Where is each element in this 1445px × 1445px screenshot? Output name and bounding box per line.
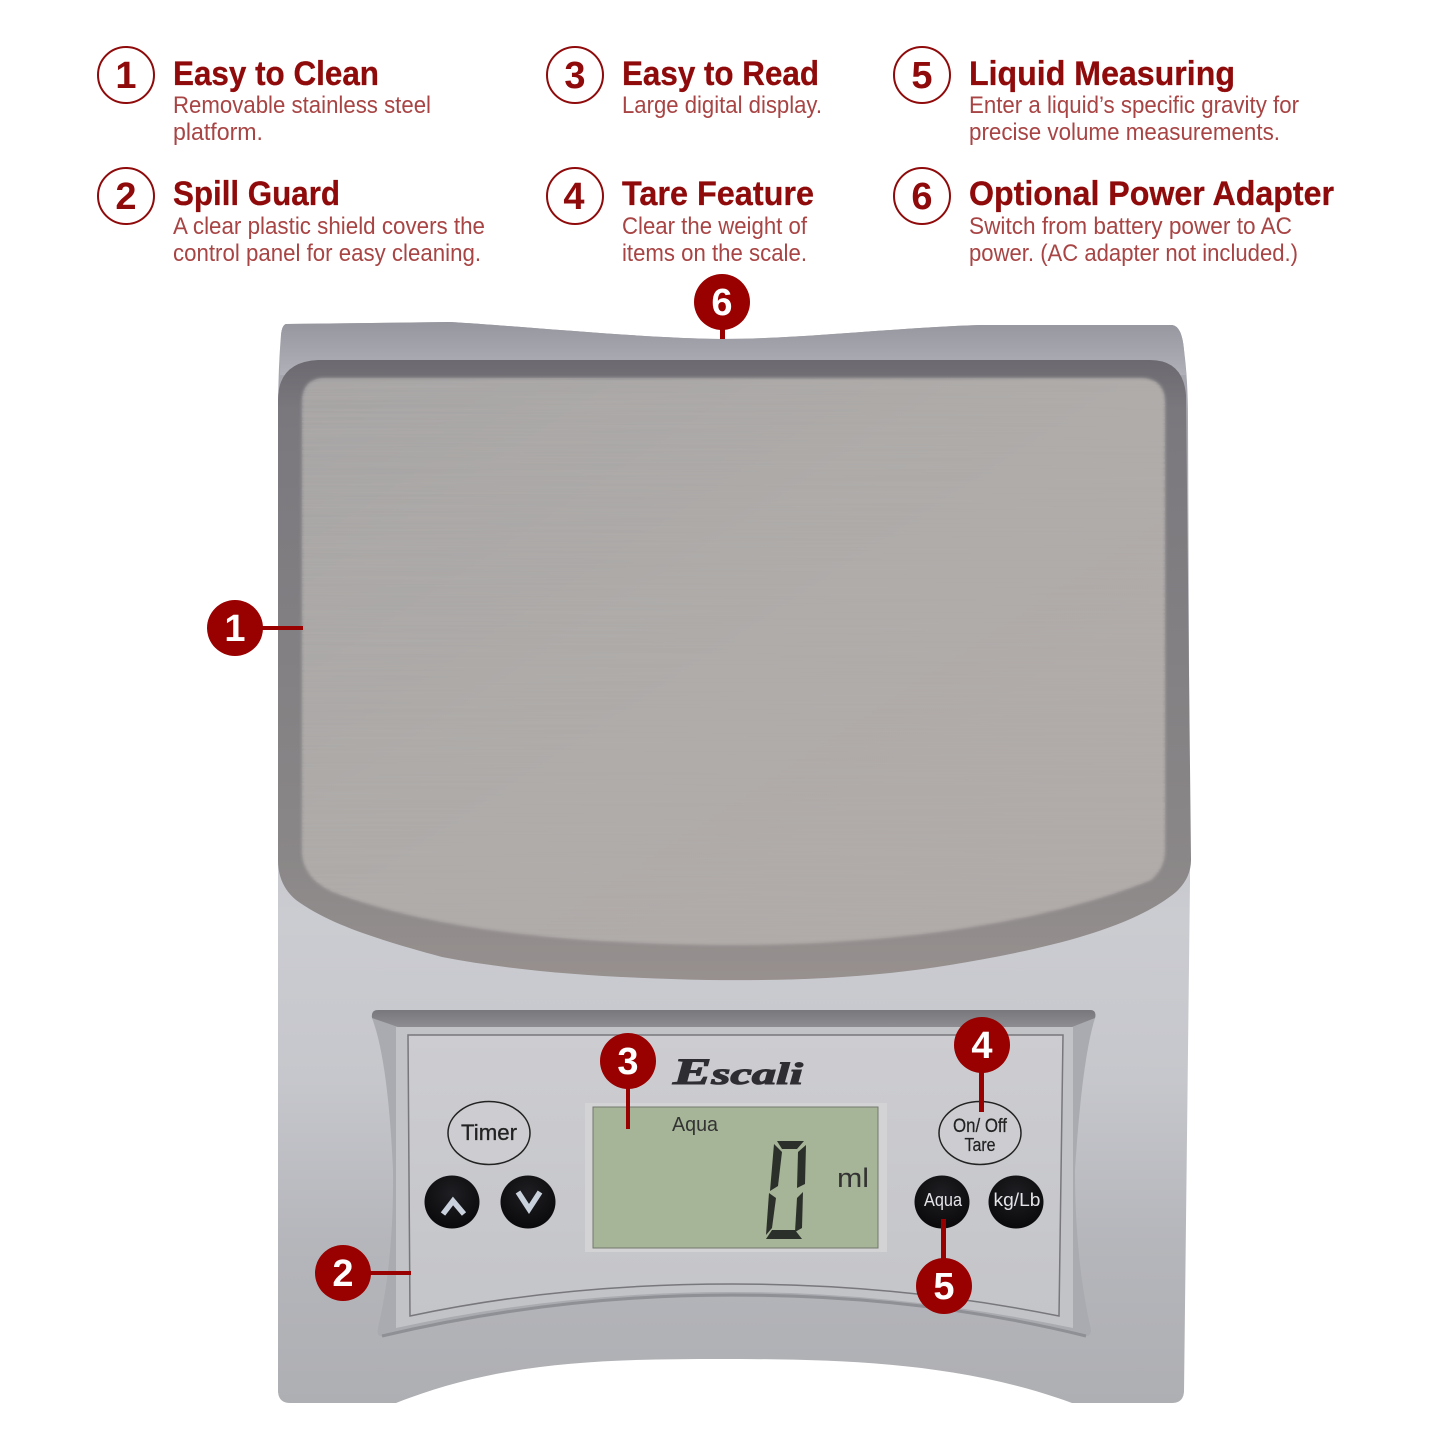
on/off tare button: [939, 1102, 1021, 1164]
feature list: [98, 47, 1334, 267]
feature 4: Tare Feature: [547, 168, 814, 267]
feature 2: Spill Guard: [98, 168, 485, 267]
marker 6: 6: [711, 282, 733, 324]
feature 4: Tare Feature: Tare Feature: [622, 175, 814, 213]
feature 1: Easy to Clean: platform.: [173, 119, 263, 146]
feature 1: Easy to Clean: Easy to Clean: [173, 55, 379, 93]
feature 5: Liquid Measuring: 5: [911, 55, 933, 97]
feature 4: Tare Feature: Clear the weight of: [622, 213, 807, 240]
up button: [424, 1176, 480, 1228]
marker 3: [600, 1033, 656, 1129]
feature 1: Easy to Clean: Removable stainless steel: [173, 92, 431, 119]
feature 6: Optional Power Adapter: [894, 168, 1334, 267]
feature 5: Liquid Measuring: precise volume measurements.: [969, 119, 1280, 146]
platform brushed face: [302, 378, 1165, 945]
control panel: [372, 1010, 1095, 1336]
platform rim: [278, 360, 1191, 980]
feature 2: Spill Guard: Spill Guard: [173, 175, 340, 213]
feature 2: Spill Guard: A clear plastic shield covers the: [173, 213, 485, 240]
kg/lb button: kg/Lb: [994, 1190, 1040, 1210]
feature 5: Liquid Measuring: Enter a liquid’s specific gravity for: [969, 92, 1299, 119]
timer button: [448, 1102, 530, 1164]
marker 4: 4: [971, 1025, 993, 1067]
feature 3: Easy to Read: [547, 47, 822, 119]
feature 6: Optional Power Adapter: Switch from battery power to AC: [969, 213, 1292, 240]
stainless steel platform: [278, 360, 1191, 980]
feature 6: Optional Power Adapter: power. (AC adapter not included.): [969, 240, 1298, 267]
scale illustration: [278, 322, 1191, 1403]
feature 1: Easy to Clean: [98, 47, 431, 146]
marker 5: [916, 1219, 972, 1314]
brand logo: E scali: [671, 1052, 804, 1093]
panel top shadow: [372, 1010, 1095, 1027]
marker 6: [694, 274, 750, 339]
panel face: [408, 1035, 1063, 1316]
seven-segment zero: [766, 1141, 806, 1239]
feature 2: Spill Guard: 2: [115, 176, 137, 218]
LCD display: ml: [837, 1163, 869, 1193]
feature 3: Easy to Read: Easy to Read: [622, 55, 819, 93]
feature 1: Easy to Clean: 1: [115, 55, 137, 97]
scale body: [278, 322, 1190, 1403]
LCD display: [585, 1103, 887, 1252]
marker 2: [315, 1245, 411, 1301]
feature 5: Liquid Measuring: Liquid Measuring: [969, 55, 1235, 93]
panel light frame: [396, 1027, 1073, 1328]
panel bevel: [372, 1010, 1095, 1336]
panel lower ridge: [382, 1295, 1086, 1336]
marker 4: [954, 1017, 1010, 1112]
marker 1: 1: [224, 608, 246, 650]
aqua button: Aqua: [924, 1190, 963, 1210]
feature 2: Spill Guard: control panel for easy cleaning.: [173, 240, 481, 267]
feature 4: Tare Feature: items on the scale.: [622, 240, 807, 267]
down button: [500, 1176, 556, 1228]
on/off tare button: Tare: [964, 1135, 996, 1155]
callout markers: [207, 274, 1010, 1314]
LCD display: Aqua: [672, 1114, 719, 1136]
feature 6: Optional Power Adapter: Optional Power Adapter: [969, 175, 1334, 213]
top strip of body: [280, 322, 1186, 375]
marker 2: 2: [332, 1253, 354, 1295]
marker 5: 5: [933, 1266, 955, 1308]
timer button: Timer: [461, 1120, 517, 1145]
feature 6: Optional Power Adapter: 6: [911, 176, 933, 218]
kg/lb button: [988, 1176, 1044, 1228]
marker 3: 3: [617, 1041, 639, 1083]
marker 1: [207, 600, 303, 656]
feature 4: Tare Feature: 4: [563, 176, 585, 218]
feature 5: Liquid Measuring: [894, 47, 1299, 146]
on/off tare button: On/ Off: [953, 1116, 1008, 1137]
feature 3: Easy to Read: 3: [564, 55, 586, 97]
feature 3: Easy to Read: Large digital display.: [622, 92, 822, 119]
aqua button: [914, 1176, 970, 1228]
